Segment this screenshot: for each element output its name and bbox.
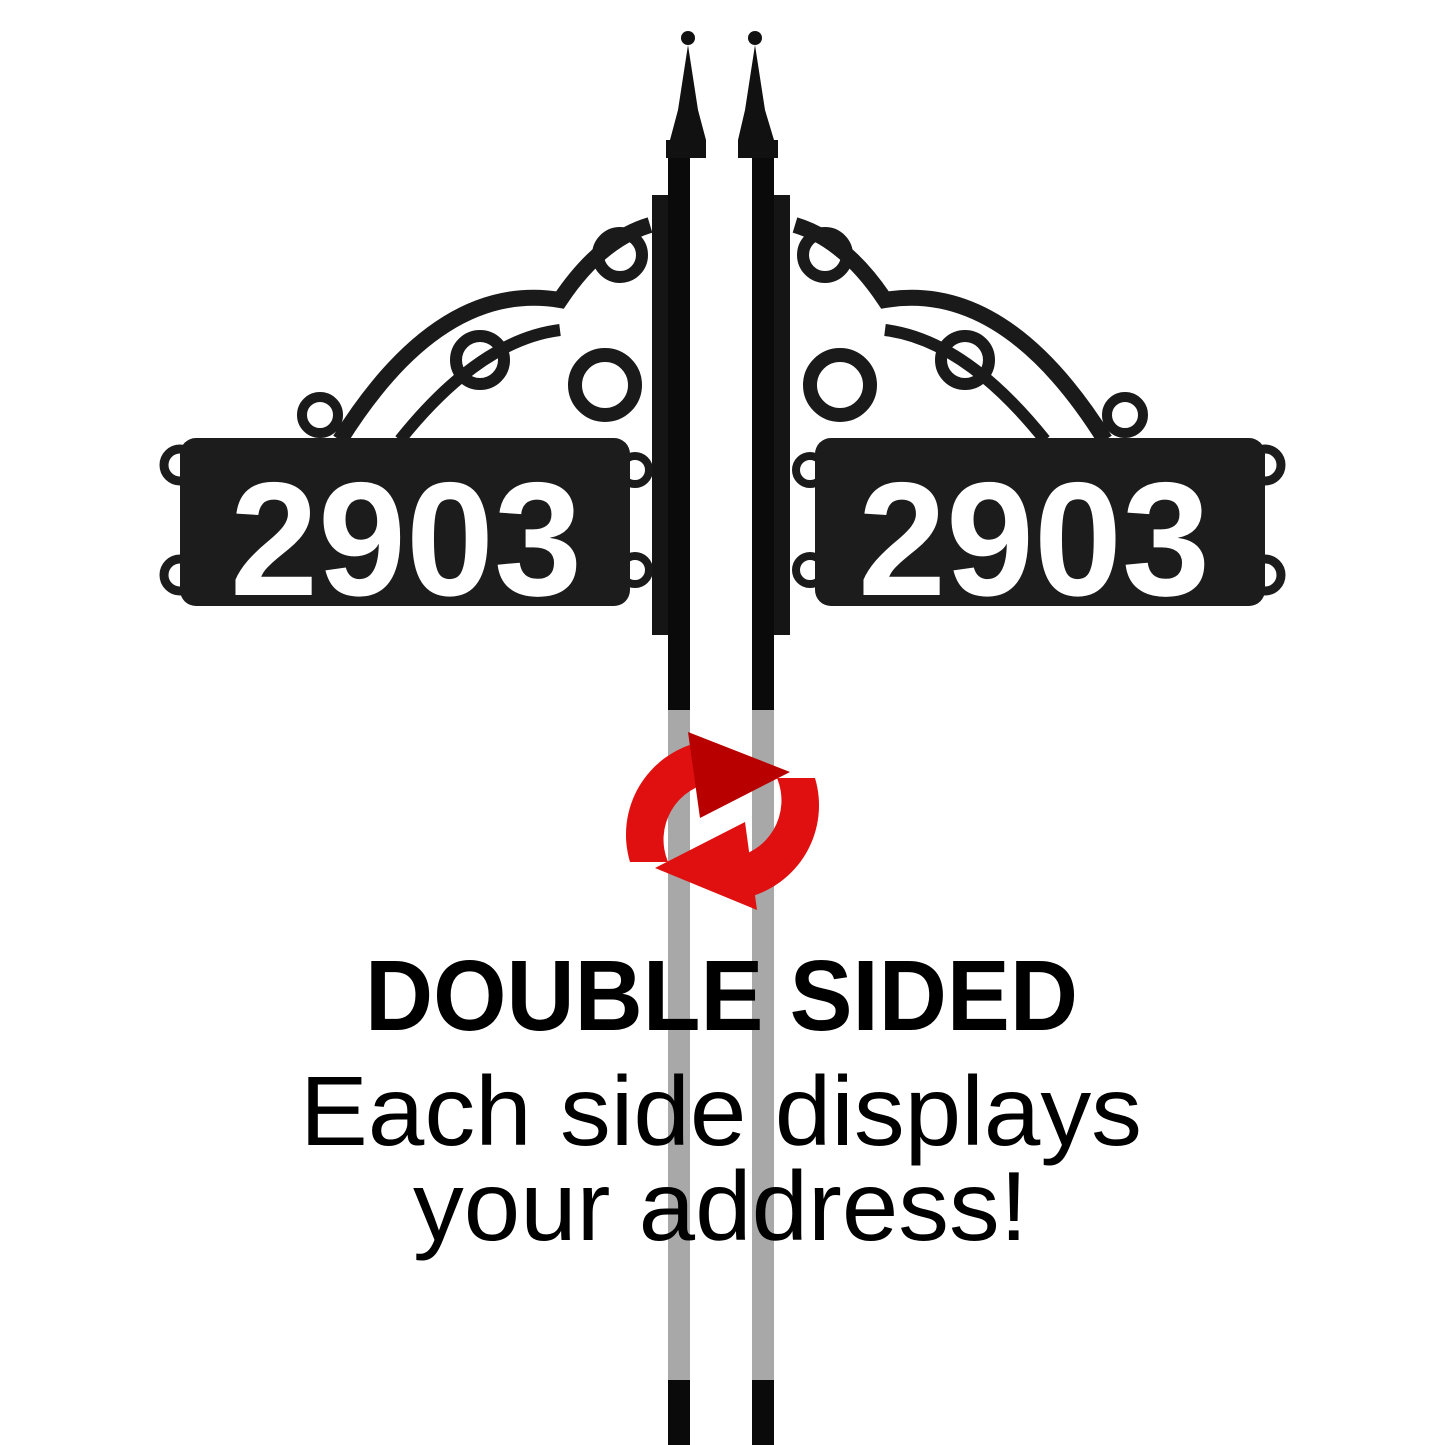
left sign [164, 225, 650, 630]
left sign: 2903 [230, 449, 582, 630]
heading: DOUBLE SIDED: DOUBLE SIDED [365, 940, 1078, 1052]
right sign: 2903 [858, 449, 1210, 630]
right sign [795, 225, 1281, 630]
icon: red swap arrows [626, 732, 819, 910]
text block: subtitle: your address! [413, 1151, 1028, 1261]
text block: subtitle [300, 1056, 1142, 1261]
right pole [738, 31, 790, 1445]
text block: subtitle: Each side displays [300, 1056, 1142, 1166]
left pole [652, 31, 706, 1445]
